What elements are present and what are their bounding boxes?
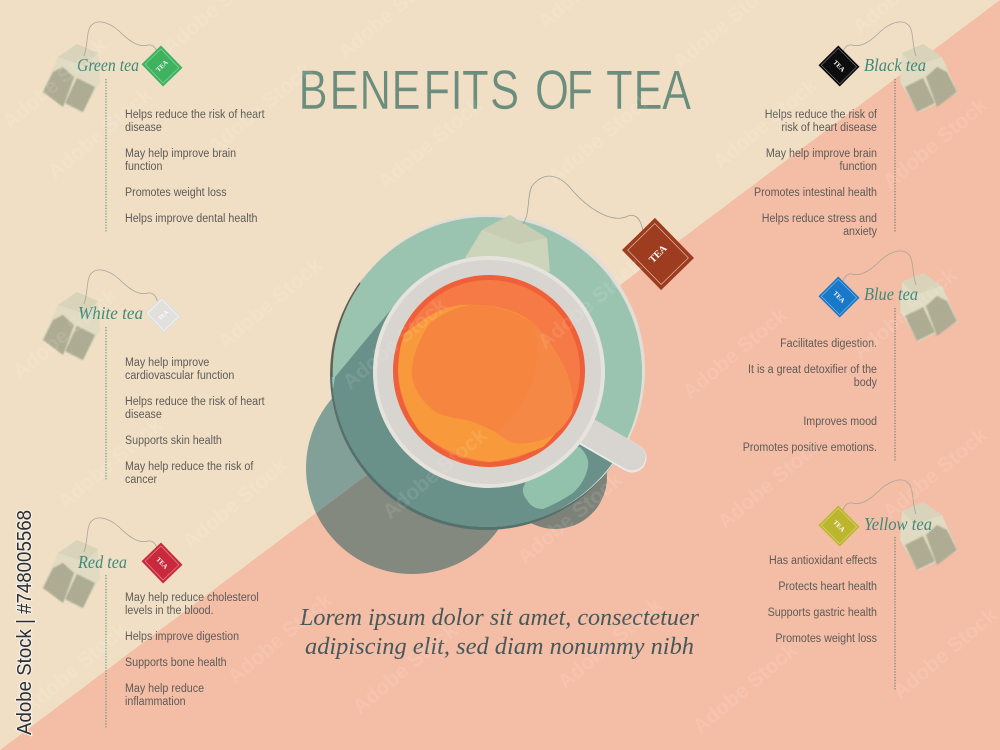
benefits list: anxiety bbox=[843, 225, 877, 238]
watermark text: Adobe Stock bbox=[878, 94, 992, 194]
benefits list bbox=[768, 554, 877, 645]
watermark text: Adobe Stock bbox=[688, 639, 802, 739]
watermark text: Adobe Stock bbox=[8, 284, 122, 384]
watermark text: Adobe Stock bbox=[543, 89, 657, 189]
dotted rule bbox=[105, 327, 107, 480]
panel: blue tea bbox=[743, 251, 958, 461]
benefits list bbox=[743, 337, 877, 454]
icon: green tea bag bbox=[42, 22, 158, 113]
icon: blue tea tag: TEA bbox=[831, 290, 846, 305]
heading: white tea: White tea bbox=[78, 303, 143, 323]
watermark text: Adobe Stock bbox=[553, 594, 667, 694]
icon: black tea tag: TEA bbox=[831, 59, 846, 74]
icon: black tea bag bbox=[842, 22, 958, 113]
tea bag behind the cup bbox=[465, 215, 550, 272]
watermark text: Adobe Stock bbox=[223, 589, 337, 689]
benefits list: Helps reduce the risk of heart bbox=[125, 108, 265, 121]
benefits list bbox=[125, 356, 265, 486]
tagline bbox=[299, 605, 700, 660]
icon: yellow tea tag: TEA bbox=[831, 519, 846, 534]
icon: black tea tag bbox=[818, 45, 860, 87]
heading: yellow tea: Yellow tea bbox=[864, 514, 932, 534]
benefits list: May help improve brain bbox=[766, 147, 877, 160]
heading: black tea: Black tea bbox=[864, 55, 926, 75]
large tea tag bbox=[622, 218, 694, 290]
dotted rule bbox=[105, 575, 107, 728]
watermark text: Adobe Stock bbox=[338, 294, 452, 394]
icon: blue tea tag bbox=[818, 276, 860, 318]
benefits list: Supports gastric health bbox=[768, 606, 877, 619]
benefits list: Promotes weight loss bbox=[125, 186, 227, 199]
benefits list: levels in the blood. bbox=[125, 604, 214, 617]
benefits list: inflammation bbox=[125, 695, 186, 708]
watermark text: Adobe Stock bbox=[888, 604, 1000, 704]
benefits list: May help reduce cholesterol bbox=[125, 591, 259, 604]
benefits list: May help improve brain bbox=[125, 147, 236, 160]
benefits list: cardiovascular function bbox=[125, 369, 234, 382]
benefits list: Promotes positive emotions. bbox=[743, 441, 877, 454]
benefits list: risk of heart disease bbox=[781, 121, 877, 134]
watermark text: Adobe Stock bbox=[0, 34, 112, 134]
cup handle bbox=[575, 424, 632, 458]
heading: green tea: Green tea bbox=[77, 55, 139, 75]
benefits list: Helps reduce the risk of bbox=[765, 108, 878, 121]
icon: red tea bag bbox=[42, 518, 158, 609]
watermark text: Adobe Stock bbox=[678, 304, 792, 404]
icon: red tea tag: TEA bbox=[154, 556, 169, 571]
panel: yellow tea bbox=[768, 480, 958, 690]
watermark text: Adobe Stock bbox=[533, 254, 647, 354]
benefits list bbox=[754, 108, 878, 238]
benefits list: May help reduce bbox=[125, 682, 204, 695]
icon: green tea tag: TEA bbox=[155, 59, 170, 74]
benefits list: Has antioxidant effects bbox=[769, 554, 877, 567]
benefits list: Supports bone health bbox=[125, 656, 227, 669]
benefits list: It is a great detoxifier of the bbox=[748, 363, 877, 376]
saucer bbox=[330, 214, 645, 530]
tagline: Lorem ipsum dolor sit amet, consectetuer bbox=[299, 605, 700, 631]
benefits list: function bbox=[125, 160, 162, 173]
icon: blue tea bag bbox=[842, 251, 958, 342]
saucer highlight patch bbox=[523, 447, 588, 509]
tagline: adipiscing elit, sed diam nonummy nibh bbox=[305, 634, 694, 660]
benefits list bbox=[125, 591, 259, 708]
watermark text: Adobe Stock bbox=[513, 469, 627, 569]
tea surface bbox=[393, 275, 585, 467]
tea bag string bbox=[523, 176, 644, 238]
benefits list: disease bbox=[125, 408, 162, 421]
cast shadow of saucer bbox=[306, 398, 607, 574]
icon: white tea tag bbox=[145, 297, 181, 333]
benefits list: cancer bbox=[125, 473, 157, 486]
panel: black tea bbox=[754, 22, 958, 238]
cup shadow on saucer bbox=[333, 307, 612, 527]
large tea tag: TEA bbox=[647, 243, 670, 265]
watermark text: Adobe Stock bbox=[708, 74, 822, 174]
benefits list bbox=[125, 108, 265, 225]
watermark text: Adobe Stock bbox=[53, 414, 167, 514]
benefits list: Promotes weight loss bbox=[775, 632, 877, 645]
benefits list: Facilitates digestion. bbox=[780, 337, 877, 350]
dotted rule bbox=[894, 79, 896, 232]
stock id vertical label: Adobe Stock | #748005568 bbox=[13, 510, 36, 735]
icon: white tea tag: TEA bbox=[158, 310, 170, 322]
cup rim bbox=[373, 256, 605, 488]
dotted rule bbox=[894, 308, 896, 461]
title: BENEFITS OF TEA bbox=[299, 59, 692, 121]
benefits list: function bbox=[840, 160, 877, 173]
watermark text: Adobe Stock bbox=[18, 619, 132, 719]
icon: yellow tea tag bbox=[818, 505, 860, 547]
heading: blue tea: Blue tea bbox=[864, 284, 918, 304]
benefits list: Helps reduce the risk of heart bbox=[125, 395, 265, 408]
dotted rule bbox=[894, 537, 896, 690]
dotted rule bbox=[105, 79, 107, 232]
icon: green tea tag bbox=[142, 45, 182, 87]
watermark text: Adobe Stock bbox=[213, 254, 327, 354]
panel: red tea bbox=[42, 518, 259, 728]
benefits list: Supports skin health bbox=[125, 434, 222, 447]
watermark text: Adobe Stock bbox=[878, 424, 992, 524]
benefits list: May help improve bbox=[125, 356, 209, 369]
watermark text: Adobe Stock bbox=[178, 454, 292, 554]
watermark text: Adobe Stock bbox=[378, 424, 492, 524]
watermark text: Adobe Stock bbox=[43, 84, 157, 184]
benefits list: body bbox=[854, 376, 877, 389]
benefits list: Promotes intestinal health bbox=[754, 186, 877, 199]
benefits list: Improves mood bbox=[803, 415, 877, 428]
watermark text: Adobe Stock bbox=[203, 59, 317, 159]
panel: green tea bbox=[42, 22, 265, 232]
icon: red tea tag bbox=[142, 542, 182, 584]
watermark text: Adobe Stock bbox=[348, 619, 462, 719]
watermark text: Adobe Stock bbox=[848, 264, 962, 364]
benefits list: May help reduce the risk of bbox=[125, 460, 254, 473]
icon: yellow tea bag bbox=[842, 480, 958, 571]
benefits list: disease bbox=[125, 121, 162, 134]
watermark text: Adobe Stock bbox=[373, 94, 487, 194]
icon: white tea bag bbox=[42, 270, 158, 361]
benefits list: Protects heart health bbox=[778, 580, 877, 593]
benefits list: Helps reduce stress and bbox=[762, 212, 877, 225]
watermark text: Adobe Stock bbox=[713, 434, 827, 534]
benefits list: Helps improve digestion bbox=[125, 630, 239, 643]
illustration: cup of tea on saucer bbox=[300, 176, 694, 600]
panel: white tea bbox=[42, 270, 265, 486]
benefits list: Helps improve dental health bbox=[125, 212, 258, 225]
heading: red tea: Red tea bbox=[77, 552, 127, 572]
